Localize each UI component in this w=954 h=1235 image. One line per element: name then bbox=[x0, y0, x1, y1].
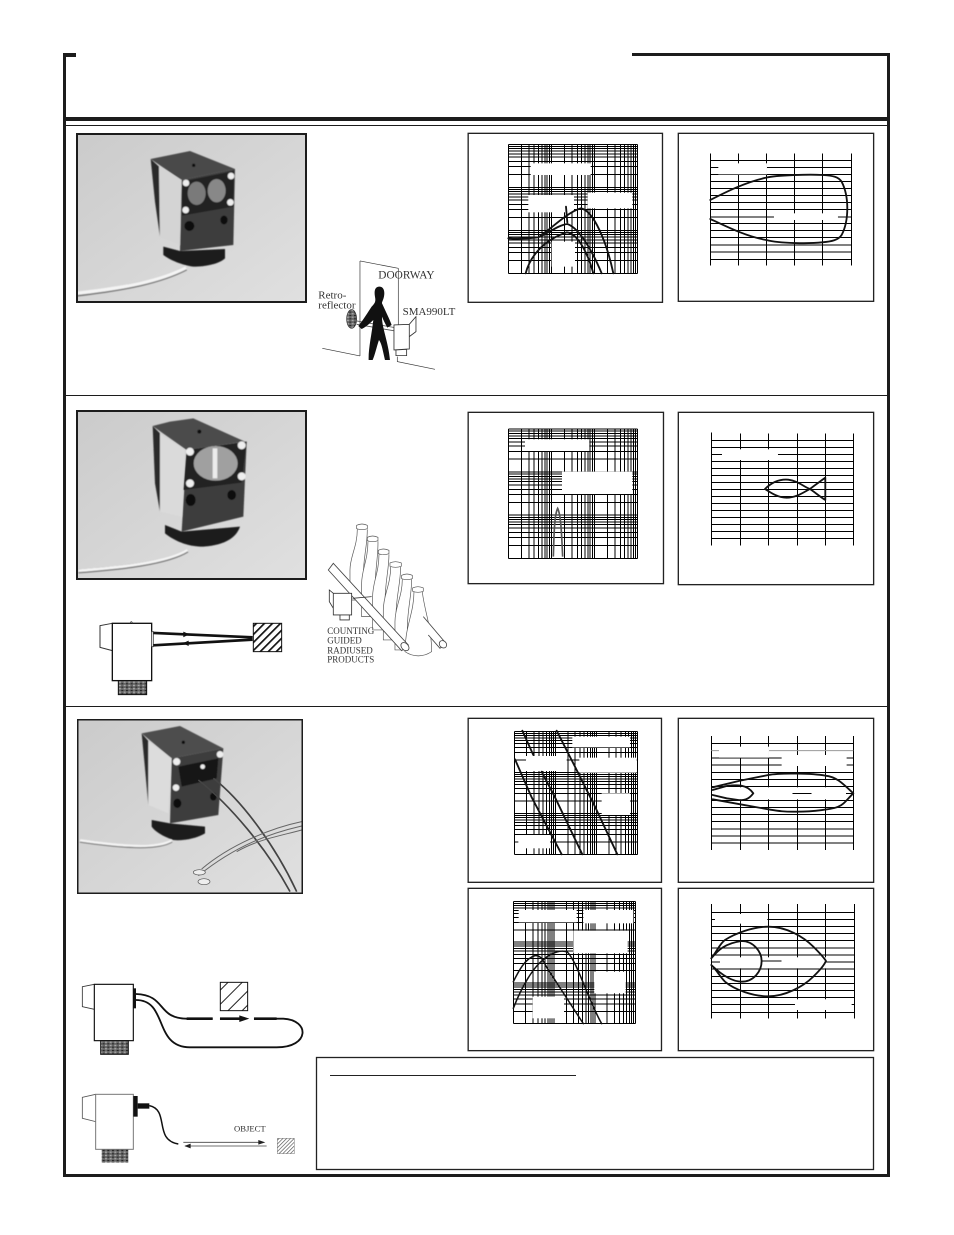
curves bbox=[711, 927, 826, 996]
curves bbox=[513, 951, 602, 1024]
curves bbox=[713, 774, 853, 812]
target bbox=[253, 623, 282, 652]
panel: polar chart 4 bbox=[678, 888, 874, 1051]
curve bbox=[710, 175, 847, 243]
light beam bbox=[357, 321, 395, 331]
curves bbox=[508, 207, 613, 273]
photo: sensor with fibre optic cables bbox=[77, 719, 303, 894]
label: application: RADIUSED bbox=[327, 645, 373, 655]
illustration: bottles on guide rail bbox=[327, 524, 448, 664]
illustration: doorway application bbox=[318, 261, 456, 369]
label: application: GUIDED bbox=[327, 636, 362, 646]
bottles bbox=[350, 524, 432, 656]
fibre cables bbox=[136, 994, 303, 1047]
label: application: PRODUCTS bbox=[327, 654, 374, 664]
label: retro-reflector: Retro- bbox=[318, 289, 347, 301]
guide rail bbox=[328, 563, 446, 651]
panel: log chart 1 bbox=[468, 133, 662, 302]
curve bbox=[553, 508, 563, 557]
photo: sensor with single lens bbox=[76, 410, 307, 580]
panel: log chart 2 bbox=[468, 412, 663, 584]
fish-shaped curve bbox=[765, 478, 825, 500]
label: doorway: DOORWAY bbox=[378, 269, 435, 281]
panel: polar chart 1 bbox=[678, 133, 874, 301]
panel: polar chart 3 bbox=[678, 718, 874, 882]
object arrows bbox=[183, 1142, 267, 1146]
page frame bbox=[63, 53, 890, 1177]
panel: polar chart 2 bbox=[678, 412, 874, 585]
diagram: diffuse fibre bbox=[82, 1094, 294, 1163]
diagram: through-beam fibre bbox=[82, 982, 303, 1054]
panel: notes box bbox=[316, 1058, 874, 1170]
label: model: SMA990LT bbox=[403, 306, 456, 318]
mini sensor bbox=[394, 317, 416, 356]
photo: sensor with twin lenses bbox=[76, 133, 307, 303]
beam arrows bbox=[153, 633, 253, 645]
target bbox=[220, 982, 248, 1011]
label: application: COUNTING bbox=[327, 626, 375, 636]
label: object: OBJECT bbox=[234, 1123, 266, 1133]
person silhouette bbox=[358, 287, 392, 360]
diagram: diffuse reflective beam bbox=[100, 622, 282, 695]
object bbox=[277, 1138, 294, 1154]
curves bbox=[515, 731, 617, 854]
mini sensor bbox=[329, 590, 372, 620]
panel: log chart 4 bbox=[468, 888, 661, 1051]
retro-reflector bbox=[347, 310, 357, 328]
panel: log chart 3 bbox=[468, 718, 661, 882]
label: retro-reflector: reflector bbox=[318, 300, 356, 312]
